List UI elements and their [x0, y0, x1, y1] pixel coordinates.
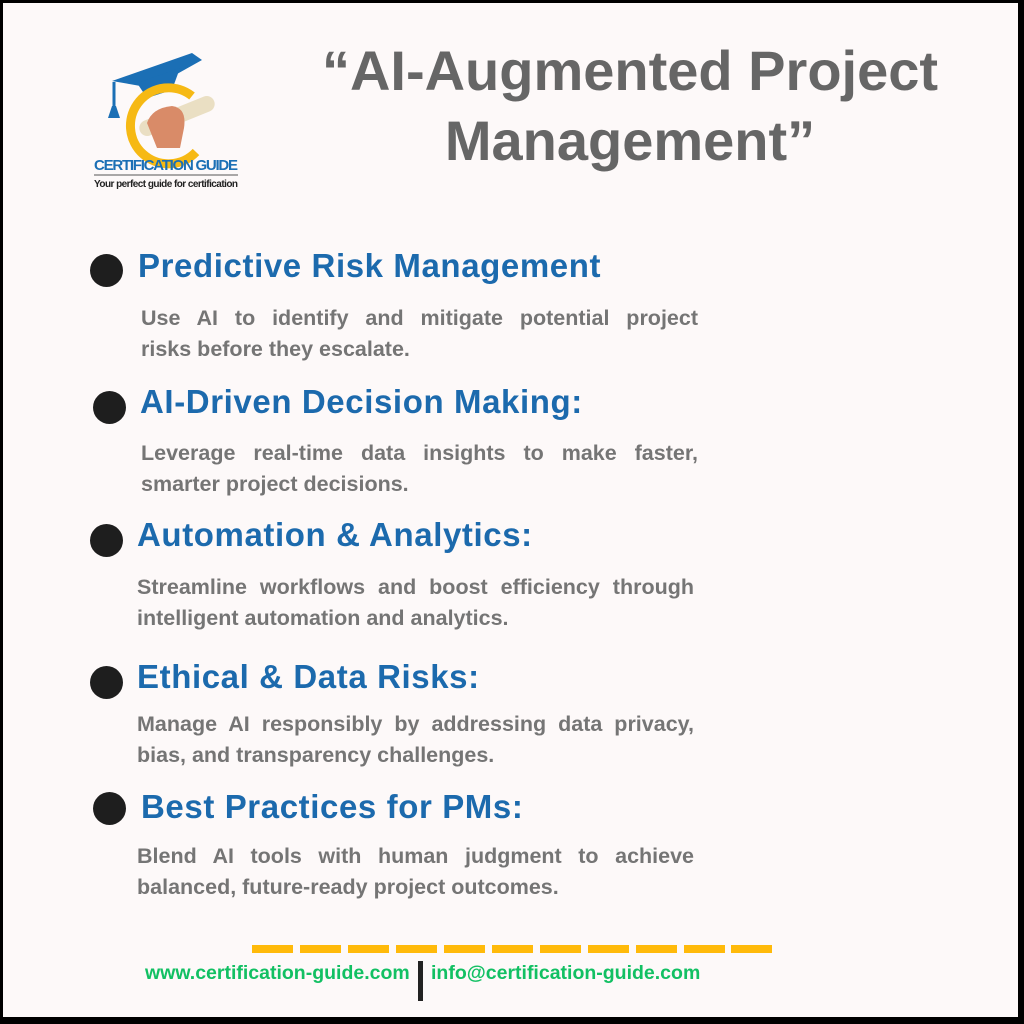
bullet 5 [93, 792, 126, 825]
bullet 4 [90, 666, 123, 699]
text 1: risks before they escalate. [141, 337, 410, 361]
bullet 1 [90, 254, 123, 287]
separator [418, 961, 423, 1001]
text 5: balanced, future-ready project outcomes. [137, 875, 559, 899]
heading 3: Automation & Analytics: [137, 516, 533, 553]
text 2: smarter project decisions. [141, 472, 409, 496]
text 3 [137, 575, 694, 630]
text 4 [137, 712, 694, 767]
text 3: Streamline workflows and boost efficiency through [137, 575, 694, 599]
text 4: bias, and transparency challenges. [137, 743, 494, 767]
heading 4: Ethical & Data Risks: [137, 658, 480, 695]
icon: C ring [130, 88, 196, 164]
dashed line [252, 945, 772, 953]
text 2 [141, 441, 698, 496]
bullet 3 [90, 524, 123, 557]
heading 1: Predictive Risk Management [138, 247, 601, 284]
text 3: intelligent automation and analytics. [137, 606, 509, 630]
title [322, 39, 938, 172]
footer website: www.certification-guide.com [145, 962, 410, 984]
logo text: CERTIFICATION GUIDE [94, 157, 238, 174]
text 4: Manage AI responsibly by addressing data privacy, [137, 712, 694, 736]
text 1 [141, 306, 698, 361]
heading 2: AI-Driven Decision Making: [140, 383, 583, 420]
text 5: Blend AI tools with human judgment to achieve [137, 844, 694, 868]
logo [94, 53, 238, 190]
title: Management” [445, 109, 815, 172]
icon: fist with scroll [137, 94, 217, 148]
logo: Your perfect guide for certification [94, 179, 238, 190]
text 5 [137, 844, 694, 899]
text 2: Leverage real-time data insights to make faster, [141, 441, 698, 465]
icon: graduation cap [108, 53, 202, 118]
footer email: info@certification-guide.com [431, 962, 700, 984]
text 1: Use AI to identify and mitigate potential project [141, 306, 698, 330]
heading 5: Best Practices for PMs: [141, 788, 523, 825]
title: “AI-Augmented Project [322, 39, 938, 102]
bullet 2 [93, 391, 126, 424]
